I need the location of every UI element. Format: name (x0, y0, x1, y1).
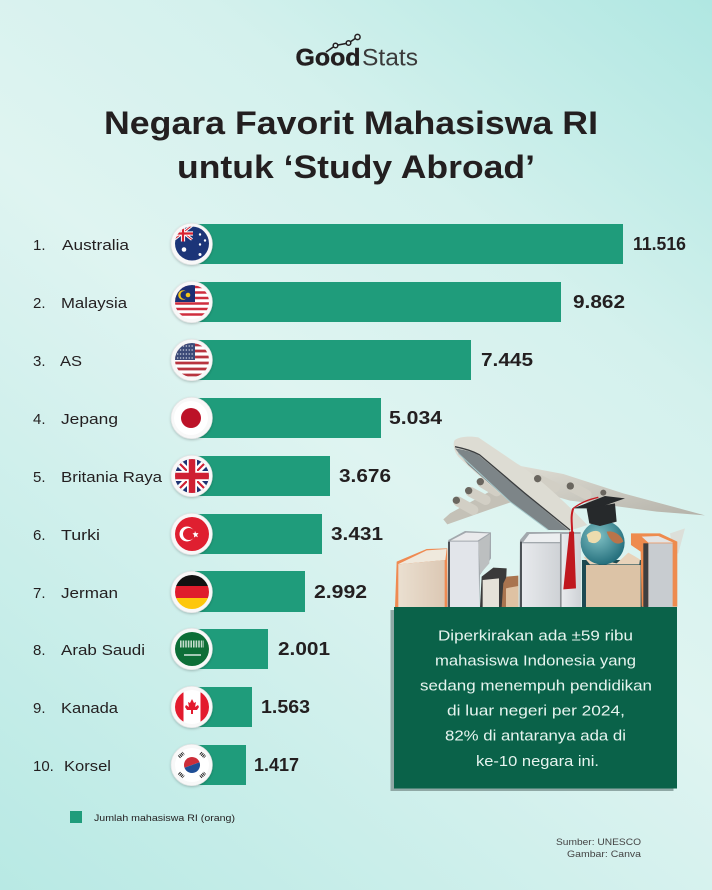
icon: globe (581, 521, 625, 565)
title: Negara Favorit Mahasiswa RI (104, 105, 598, 141)
row 7: Jerman: 7. (33, 585, 46, 602)
row 5: Britania Raya: 5. (33, 469, 46, 486)
logo: GoodStats: Stats (362, 44, 418, 72)
row 9: Kanada: 9. (33, 700, 46, 717)
row 9: Kanada: 1.563 (261, 697, 310, 717)
row 4: Jepang: Jepang (61, 411, 118, 428)
row 8: Arab Saudi: 8. (33, 642, 46, 659)
row 2: Malaysia: Malaysia (61, 295, 128, 312)
row 10: Korsel (33, 744, 299, 786)
source note: Sumber: UNESCO (556, 837, 641, 848)
illustration: plane, books, globe and graduation cap (395, 437, 705, 607)
row 4: Jepang (33, 397, 442, 439)
icon: graduation cap (563, 496, 625, 589)
title: untuk ‘Study Abroad’ (177, 149, 535, 185)
callout: Diperkirakan ada ±59 ribu (438, 628, 633, 644)
row 5: Britania Raya: 3.676 (339, 466, 391, 486)
row 3: AS: 7.445 (481, 350, 533, 370)
row 3: AS: 3. (33, 353, 46, 370)
callout: 82% di antaranya ada di (445, 728, 626, 744)
callout: mahasiswa Indonesia yang (435, 652, 636, 670)
row 6: Turki (33, 513, 383, 555)
row 7: Jerman: 2.992 (314, 582, 367, 602)
row 9: Kanada: Kanada (61, 700, 119, 717)
row 1: Australia (33, 223, 686, 265)
callout: sedang menempuh pendidikan (420, 678, 652, 694)
source note (556, 837, 642, 860)
row 4: Jepang: 5.034 (389, 408, 442, 428)
icon: stack of books (395, 531, 677, 607)
row 6: Turki: 6. (33, 527, 46, 544)
legend (70, 811, 235, 824)
source note: Gambar: Canva (567, 849, 642, 860)
row 5: Britania Raya (33, 455, 391, 497)
callout: ke-10 negara ini. (476, 753, 599, 770)
row 6: Turki: 3.431 (331, 524, 383, 544)
row 1: Australia: Australia (62, 237, 130, 254)
logo: GoodStats (296, 34, 418, 72)
row 9: Kanada (33, 686, 310, 728)
row 8: Arab Saudi (33, 628, 330, 670)
title (104, 105, 598, 185)
row 1: Australia: 1. (33, 237, 46, 254)
row 7: Jerman: Jerman (61, 585, 118, 602)
row 10: Korsel: 1.417 (254, 755, 299, 775)
bar chart (33, 223, 686, 786)
row 2: Malaysia (33, 281, 625, 323)
callout: di luar negeri per 2024, (447, 702, 625, 720)
row 7: Jerman (33, 571, 367, 613)
row 1: Australia: 11.516 (633, 234, 686, 254)
icon: airplane (443, 437, 705, 554)
row 10: Korsel: Korsel (64, 758, 111, 775)
row 6: Turki: Turki (61, 527, 100, 544)
row 8: Arab Saudi: 2.001 (278, 639, 330, 659)
row 10: Korsel: 10. (33, 758, 54, 775)
row 3: AS: AS (60, 353, 82, 370)
logo: GoodStats: Good (296, 44, 360, 72)
callout (390, 607, 677, 791)
row 5: Britania Raya: Britania Raya (61, 469, 163, 486)
legend: Jumlah mahasiswa RI (orang) (94, 813, 235, 824)
row 2: Malaysia: 9.862 (573, 292, 625, 312)
row 8: Arab Saudi: Arab Saudi (61, 642, 145, 659)
row 4: Jepang: 4. (33, 411, 46, 428)
row 3: AS (33, 339, 533, 381)
row 2: Malaysia: 2. (33, 295, 46, 312)
